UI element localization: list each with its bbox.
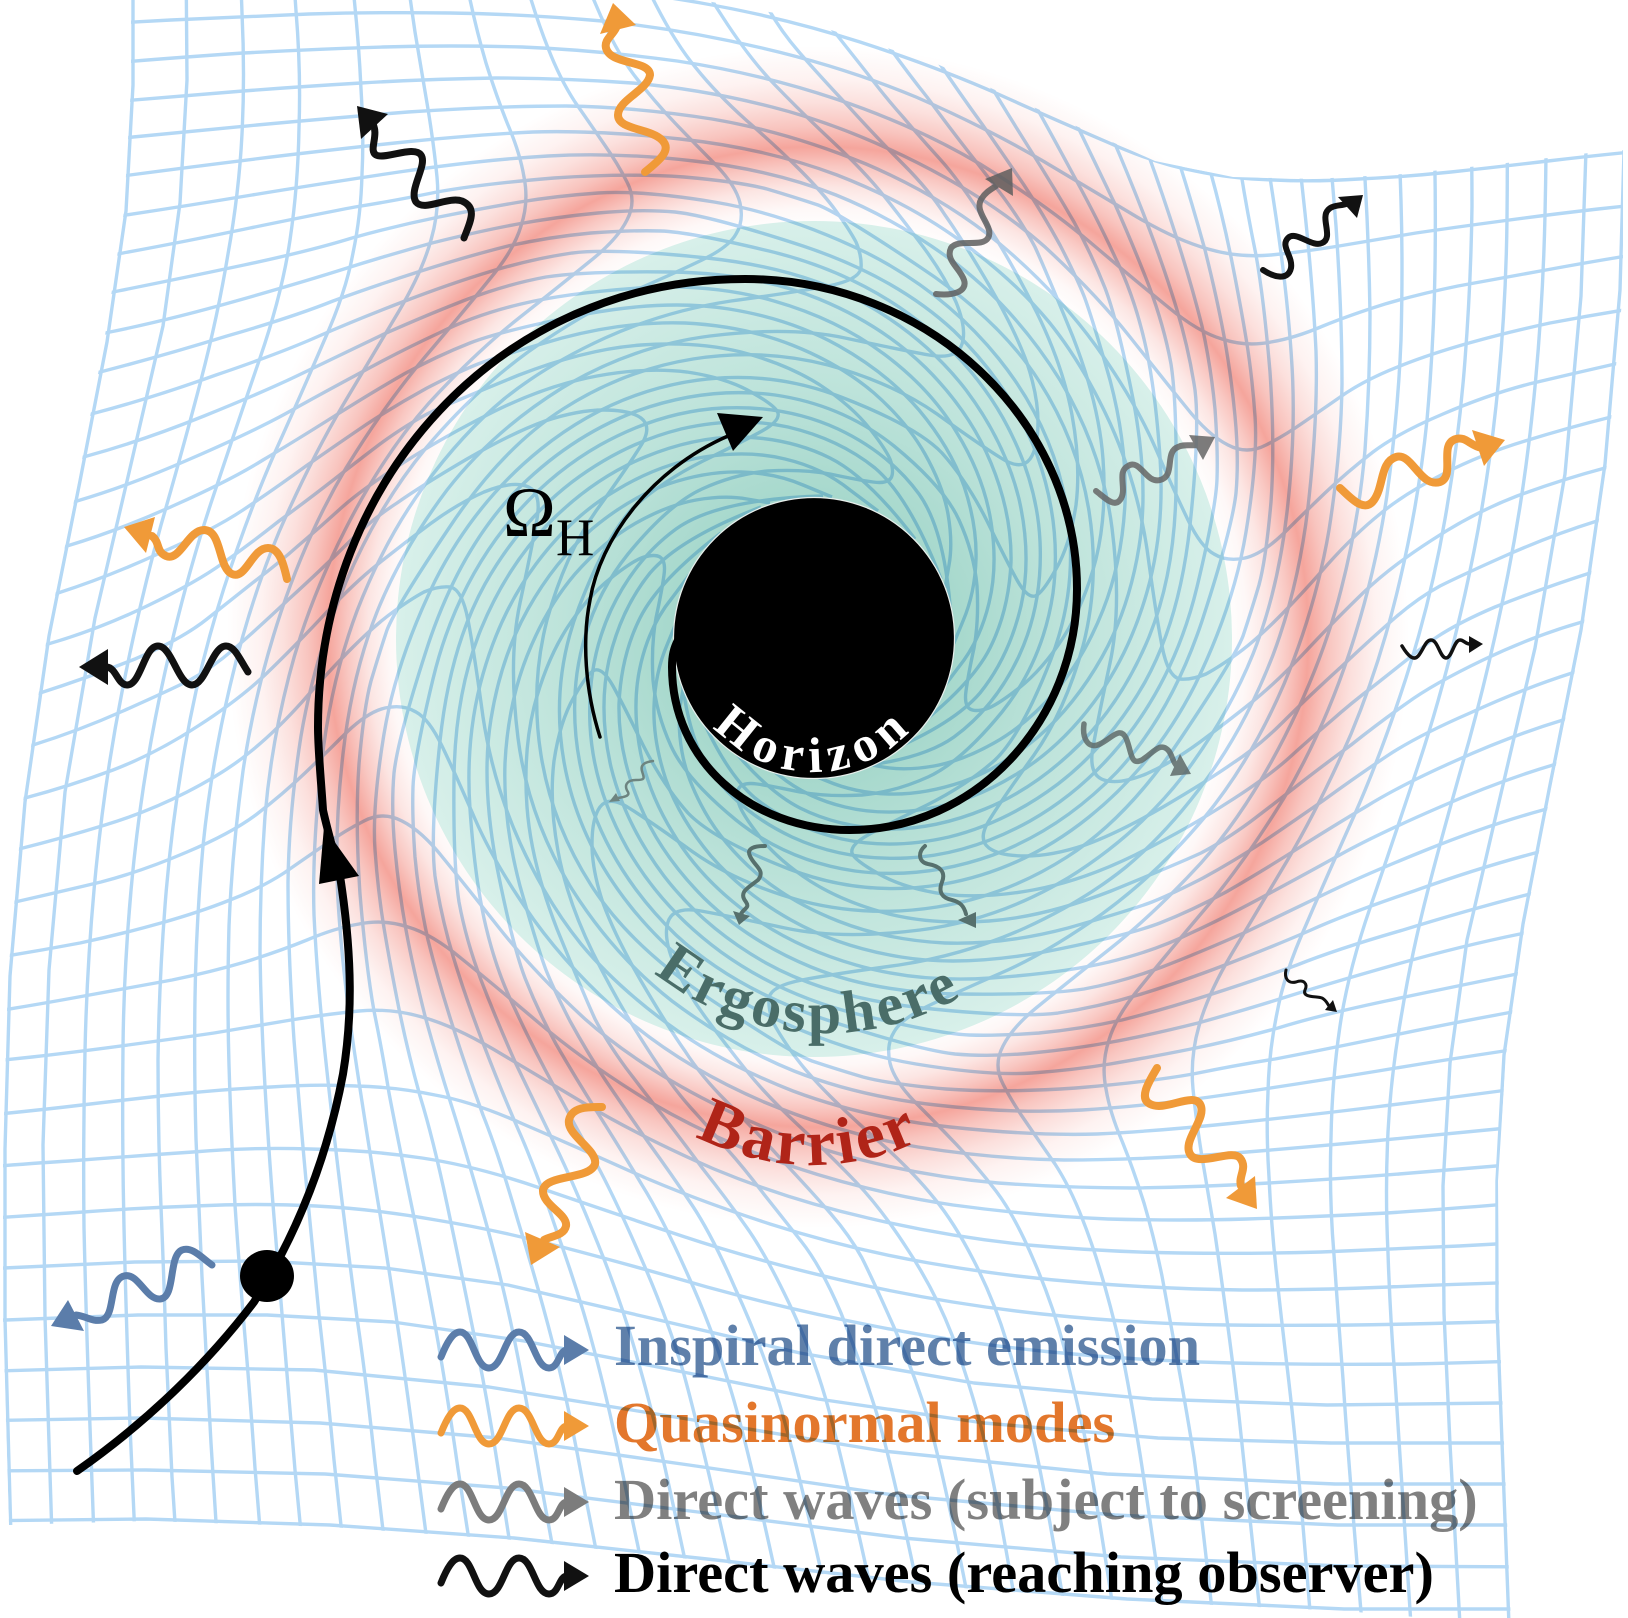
legend row: inspiral direct emission: Inspiral direct emission: [614, 1313, 1200, 1378]
wave: small infalling wave left of hole: [609, 761, 653, 802]
wave: screened direct wave right, gray: [1096, 435, 1215, 503]
label: Omega H: Ω: [503, 474, 556, 552]
black hole horizon: [672, 496, 956, 780]
wave: quasinormal left, orange: [124, 517, 287, 579]
wave: screened direct wave, gray, right of hole: [1084, 724, 1191, 776]
wave: screened direct wave top, gray: [936, 168, 1013, 294]
wave: infalling wave below hole, right: [920, 846, 976, 928]
spin arrow around the horizon: [586, 413, 763, 737]
wave: small direct wave right, black: [1402, 636, 1483, 658]
wave: quasinormal lower right, orange: [1145, 1068, 1257, 1209]
legend: [441, 1313, 1478, 1605]
legend row: direct waves reaching observer: Direct waves (reaching observer): [614, 1540, 1434, 1605]
label: Omega H: [503, 474, 594, 567]
wave: quasinormal top, orange: [600, 3, 666, 172]
wave: direct wave left, black: [79, 646, 248, 685]
legend row: quasinormal modes: Quasinormal modes: [614, 1390, 1115, 1455]
legend row: direct waves subject to screening: Direct waves (subject to screening): [614, 1467, 1478, 1532]
label: Barrier: Barrier: [696, 1098, 911, 1166]
wave: infalling wave below hole, left: [733, 846, 765, 925]
ergosphere disc: [396, 221, 1232, 1057]
wave: inspiral direct emission, blue: [51, 1249, 212, 1331]
wave: direct wave top right, black: [1263, 195, 1363, 277]
orbiting compact body: [240, 1250, 294, 1302]
wave: quasinormal bottom, orange: [525, 1107, 602, 1265]
wave: direct wave top left, black: [357, 106, 471, 238]
arrowhead on trajectory: [319, 827, 359, 884]
wave: tiny direct wave lower right, black: [1285, 970, 1337, 1012]
label: Ergosphere: Ergosphere: [654, 942, 958, 1046]
label: Horizon: Horizon: [712, 702, 910, 772]
barrier ring: [218, 37, 1418, 1237]
wave: quasinormal right, orange: [1340, 430, 1505, 505]
inspiral trajectory with arrowhead and orbiting body: [77, 279, 1077, 1471]
label: Omega H: H: [556, 509, 594, 567]
